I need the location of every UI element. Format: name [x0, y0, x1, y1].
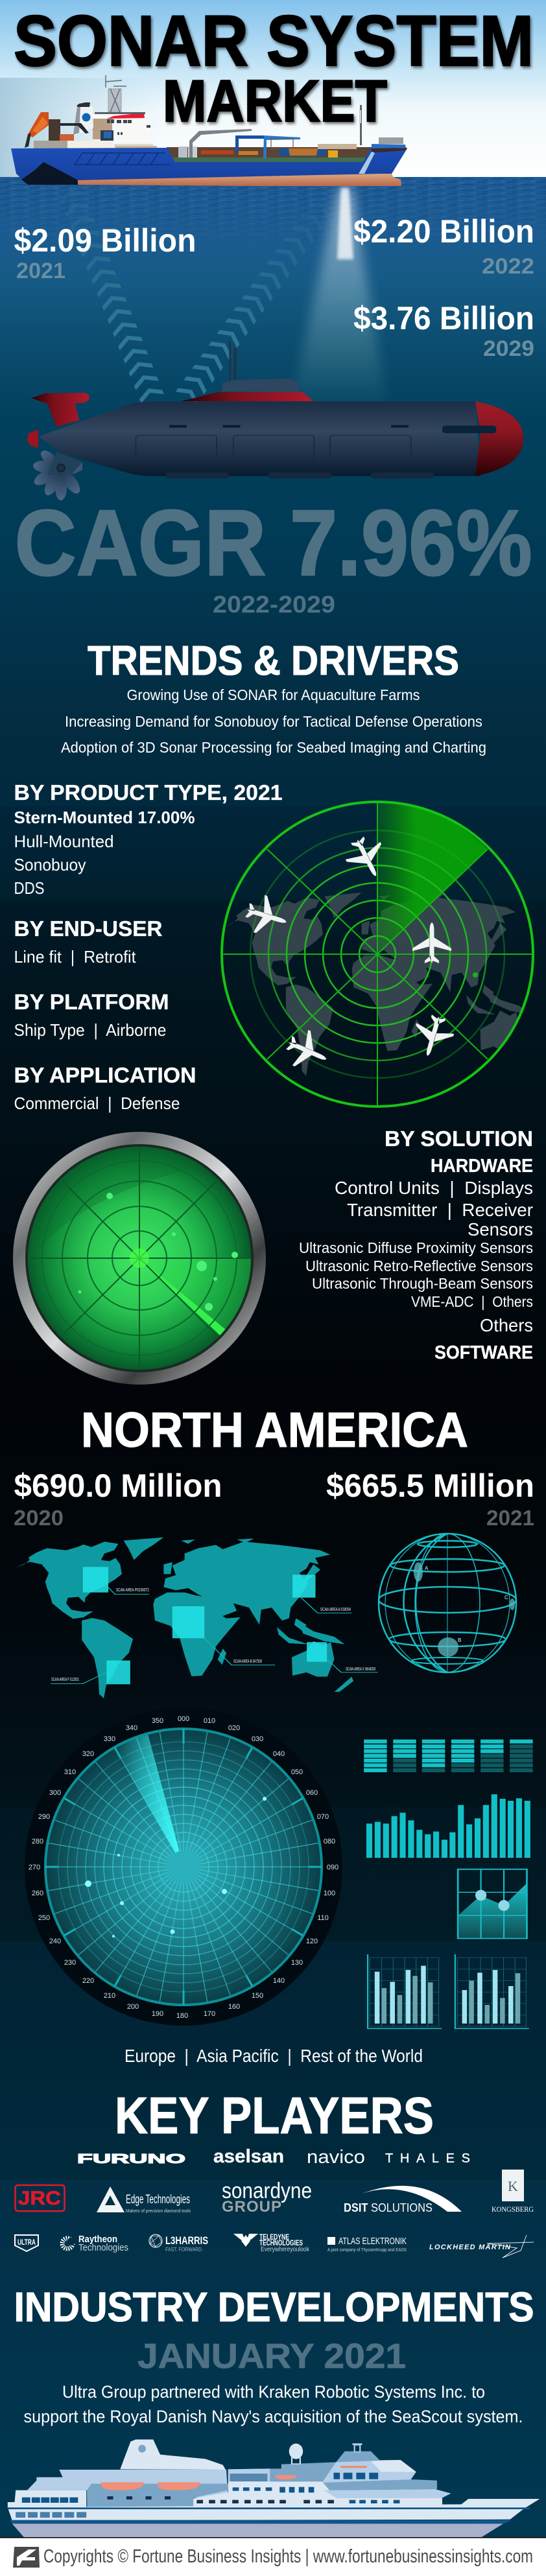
ship mast and antenna [106, 75, 126, 112]
footer band [0, 2537, 546, 2576]
panel: by product type: Stern-Mounted 17.00% [14, 808, 195, 827]
logo: DSIT Solutions [344, 2186, 462, 2214]
logo: Thales: THALES [385, 2151, 470, 2166]
tail fin [31, 393, 89, 427]
panel: by product type: BY PRODUCT TYPE, 2021 [14, 780, 283, 804]
dial bearing labels: 310 [64, 1768, 76, 1776]
logo: Atlas Elektronik: A joint company of ThyssenKrupp and EADS [327, 2248, 407, 2253]
logo: Edge Technologies: Edge Technologies [126, 2193, 190, 2207]
logo: Edge Technologies [97, 2186, 191, 2214]
panel: by platform: Ship Type | Airborne [14, 1020, 166, 1040]
logo: L3Harris: L3HARRIS [165, 2234, 208, 2247]
dial bearing labels: 180 [176, 2012, 188, 2020]
dial bearing labels: 060 [306, 1789, 318, 1797]
heading: north america: NORTH AMERICA [81, 1403, 468, 1458]
chart: grouped bars right [455, 1954, 529, 2028]
logo: Teledyne: TECHNOLOGIES [259, 2238, 303, 2247]
panel: by end-user [14, 917, 163, 966]
panel: by solution: Ultrasonic Through-Beam Sensors [312, 1275, 533, 1292]
logo: Sonardyne Group [222, 2179, 312, 2216]
panel: by solution: VME-ADC | Others [411, 1293, 533, 1310]
title [14, 1, 534, 134]
dial bearing labels: 080 [324, 1838, 335, 1845]
logo: Ultra [15, 2235, 38, 2251]
ship hull panels [75, 153, 170, 165]
chart: segmented level meters [364, 1740, 533, 1772]
panel: by solution [299, 1127, 533, 1363]
panel: by product type [14, 780, 283, 898]
dial bearing labels: 150 [252, 1992, 263, 2000]
illustration: world map with scan areas: SCAN AREA P02360T2 [116, 1588, 149, 1593]
logo: Raytheon Technologies: Technologies [78, 2242, 128, 2253]
value 2022 [353, 213, 534, 279]
dial bearing labels: 230 [64, 1959, 76, 1967]
logo: Teledyne: Everywhereyoulook [261, 2246, 310, 2253]
footer logo [13, 2547, 40, 2568]
panel: by application: Commercial | Defense [14, 1094, 180, 1113]
dial bearing labels: 030 [252, 1735, 263, 1743]
dial sweep [115, 1734, 184, 1867]
panel: by application: BY APPLICATION [14, 1063, 196, 1087]
radar sweep [377, 802, 488, 954]
dial bearing labels: 220 [82, 1977, 94, 1985]
illustration: green radar scope [6, 1128, 266, 1385]
planes [242, 831, 457, 1077]
panel: by application [14, 1063, 196, 1113]
submarine hull [38, 401, 481, 476]
logo: L3Harris: FAST. FORWARD. [165, 2247, 203, 2253]
sonar light beam [289, 188, 389, 415]
logo: Aselsan: aselsan [213, 2146, 284, 2167]
logo: Furuno: FURUNO [77, 2152, 185, 2166]
value 2021 north america [326, 1468, 534, 1530]
background: sea ripples [0, 177, 546, 229]
illustration: wireframe globe: A [425, 1565, 429, 1571]
trends text block: Increasing Demand for Sonobuoy for Tactical Defense Operations [65, 713, 482, 730]
panel: by product type: Hull-Mounted [14, 832, 114, 851]
heading: key players: KEY PLAYERS [115, 2087, 434, 2144]
panel: by solution: SOFTWARE [434, 1342, 533, 1363]
illustration: cruise ship [8, 2439, 540, 2538]
dial bearing labels: 020 [228, 1724, 240, 1732]
dial bearing labels: 010 [204, 1717, 215, 1725]
tire track trail left [60, 192, 164, 402]
dial bearing labels: 130 [291, 1959, 303, 1967]
illustration: wireframe globe: C [504, 1595, 508, 1600]
dial bearing labels: 330 [104, 1735, 115, 1743]
panel: by solution: Transmitter | Receiver [347, 1200, 533, 1220]
tail cap [27, 430, 38, 449]
logo: Sonardyne Group: sonardyne [222, 2179, 312, 2203]
logo: JRC [16, 2185, 65, 2211]
panel: by product type: DDS [14, 878, 44, 898]
title: MARKET [163, 69, 387, 134]
dial bearing labels: 070 [317, 1813, 329, 1821]
ship hull shadow [21, 162, 78, 185]
illustration: radar with planes [222, 802, 537, 1107]
ship aft deck [34, 141, 157, 148]
logo: Navico: navico [307, 2147, 365, 2168]
dial bearing labels: 090 [327, 1864, 338, 1871]
illustration: world map with scan areas [15, 1538, 378, 1698]
panel: by solution: Others [480, 1315, 533, 1335]
dial bearing labels: 160 [228, 2003, 240, 2011]
value 2021 north america: 2021 [486, 1506, 534, 1530]
development text: Ultra Group partnered with Kraken Robotic Systems Inc. to [62, 2382, 485, 2402]
dial bearing labels: 280 [32, 1838, 43, 1845]
illustration: world map with scan areas: SCAN AREA B 047500 [233, 1659, 262, 1664]
value 2021 north america: $665.5 Million [326, 1468, 534, 1504]
illustration: world map with scan areas: SCAN AREA X N64D00 [346, 1667, 375, 1672]
dial bearing labels: 050 [291, 1768, 303, 1776]
value 2020 [14, 1468, 222, 1530]
logo: Kongsberg: KONGSBERG [492, 2205, 534, 2214]
dial bearing labels: 340 [126, 1724, 137, 1732]
dial bearing labels [29, 1715, 338, 2020]
value 2021: $2.09 Billion [14, 222, 196, 259]
dial bearing labels: 120 [306, 1938, 318, 1945]
illustration: world map with scan areas: SCAN AREA F 012001 [51, 1678, 79, 1682]
panel: by platform [14, 990, 169, 1040]
logo: Edge Technologies: Makers of precision diamond tools [126, 2209, 191, 2214]
ship cargo deck machinery [167, 129, 374, 162]
CAGR headline: 2022-2029 [213, 591, 335, 618]
background: deep water bands [0, 712, 546, 2538]
dial blips [85, 1797, 267, 1938]
dial rings [58, 1742, 309, 1992]
value 2020: $690.0 Million [14, 1468, 222, 1504]
logo: DSIT Solutions: DSIT SOLUTIONS [344, 2201, 433, 2214]
submarine propeller [32, 448, 83, 500]
regions text: Europe | Asia Pacific | Rest of the World [125, 2046, 423, 2066]
value 2021: 2021 [16, 259, 65, 283]
panel: by solution: Control Units | Displays [335, 1178, 533, 1198]
panel: by solution: Ultrasonic Retro-Reflective Sensors [305, 1258, 533, 1274]
development text [23, 2382, 523, 2426]
radar world map [224, 893, 537, 1076]
ship white superstructure [93, 112, 151, 149]
logo: Raytheon Technologies [62, 2234, 128, 2253]
logo: Kongsberg [492, 2170, 534, 2214]
trends text block: Growing Use of SONAR for Aquaculture Farms [127, 686, 420, 703]
panel: by solution: HARDWARE [431, 1156, 533, 1177]
dial bearing labels: 350 [152, 1717, 163, 1725]
dial bearing labels: 250 [38, 1914, 50, 1922]
panel: by end-user: Line fit | Retrofit [14, 947, 136, 966]
ship hull [11, 146, 407, 185]
submarine masts [229, 342, 237, 381]
development text: support the Royal Danish Navy's acquisition of the SeaScout system. [23, 2407, 523, 2426]
panel: by solution: BY SOLUTION [385, 1127, 533, 1151]
dial bearing labels: 140 [273, 1977, 285, 1985]
value 2029: 2029 [483, 336, 534, 361]
logo: Teledyne [233, 2232, 310, 2253]
logo: Teledyne: TELEDYNE [259, 2232, 289, 2242]
logo: Lockheed Martin [429, 2235, 534, 2258]
illustration: teal radar dial [25, 1708, 342, 2026]
dial bearing labels: 040 [273, 1750, 285, 1758]
panel: by product type: Sonobuoy [14, 855, 86, 874]
ship waterline rust band [78, 174, 401, 186]
logo: JRC: JRC [18, 2188, 61, 2209]
value 2021 [14, 222, 196, 283]
logo: Raytheon Technologies: Raytheon [78, 2234, 117, 2245]
dial bearing labels: 100 [324, 1890, 335, 1897]
trends text block: Adoption of 3D Sonar Processing for Seabed Imaging and Charting [61, 739, 486, 756]
illustration: wireframe globe: B [458, 1637, 461, 1643]
ship funnel [73, 102, 93, 136]
dial hub [167, 1851, 200, 1883]
background: horizon haze [0, 78, 546, 178]
submarine conning tower [221, 379, 300, 392]
logo: Ultra: ULTRA [18, 2238, 36, 2247]
value 2020: 2020 [14, 1506, 64, 1530]
submarine red sail [181, 392, 313, 401]
dial bearing labels: 170 [204, 2010, 215, 2018]
dial bearing labels: 240 [49, 1938, 61, 1945]
illustration: wireframe globe [379, 1534, 516, 1672]
dial spokes [45, 1729, 322, 2005]
panel: by end-user: BY END-USER [14, 917, 163, 941]
panel: by solution: Sensors [468, 1219, 533, 1239]
dial bearing labels: 320 [82, 1750, 94, 1758]
panel: by solution: Ultrasonic Diffuse Proximity Sensors [299, 1239, 533, 1256]
dial bearing labels: 190 [152, 2010, 163, 2018]
dial bearing labels: 290 [38, 1813, 50, 1821]
dial bearing labels: 300 [49, 1789, 61, 1797]
panel: by platform: BY PLATFORM [14, 990, 169, 1014]
logo: Sonardyne Group: GROUP [222, 2198, 281, 2216]
heading: trends and drivers: TRENDS & DRIVERS [88, 637, 459, 684]
chart: grouped bars left [368, 1954, 442, 2028]
dial bearing labels: 000 [178, 1715, 189, 1723]
dial bearing labels: 110 [317, 1914, 329, 1922]
logo: Atlas Elektronik: ATLAS ELEKTRONIK [338, 2236, 407, 2247]
background: sea [0, 177, 546, 712]
logo: Kongsberg: K [508, 2178, 518, 2194]
logo: Lockheed Martin: LOCKHEED MARTIN [429, 2243, 511, 2251]
ship bow [359, 137, 407, 174]
chart: bar series [366, 1794, 530, 1858]
dial bearing labels: 260 [32, 1890, 43, 1897]
value 2022: $2.20 Billion [353, 213, 534, 250]
trends text block [61, 686, 486, 756]
background: sky [0, 0, 546, 178]
value 2029: $3.76 Billion [353, 300, 534, 336]
ship orange rescue crane [25, 112, 89, 148]
illustration: submarine [27, 342, 523, 478]
submarine nose cone [475, 401, 523, 476]
dial bearing labels: 200 [127, 2003, 139, 2011]
date: january 2021: JANUARY 2021 [137, 2337, 406, 2376]
tire track trail right [175, 215, 320, 402]
dial tick marks [45, 1729, 322, 2005]
logo: L3Harris [149, 2234, 208, 2253]
dial bearing labels: 210 [104, 1992, 115, 2000]
chart: area line chart [458, 1869, 527, 1938]
dial bearing labels: 270 [29, 1864, 40, 1871]
value 2022: 2022 [482, 254, 534, 279]
ship foremast [359, 105, 362, 145]
illustration: world map with scan areas: SCAN AREA A 018004 [320, 1608, 351, 1612]
logo: Atlas Elektronik [327, 2236, 407, 2253]
chart group: dashboards [364, 1740, 533, 2028]
illustration: cargo ship [11, 75, 407, 186]
value 2029 [353, 300, 534, 361]
